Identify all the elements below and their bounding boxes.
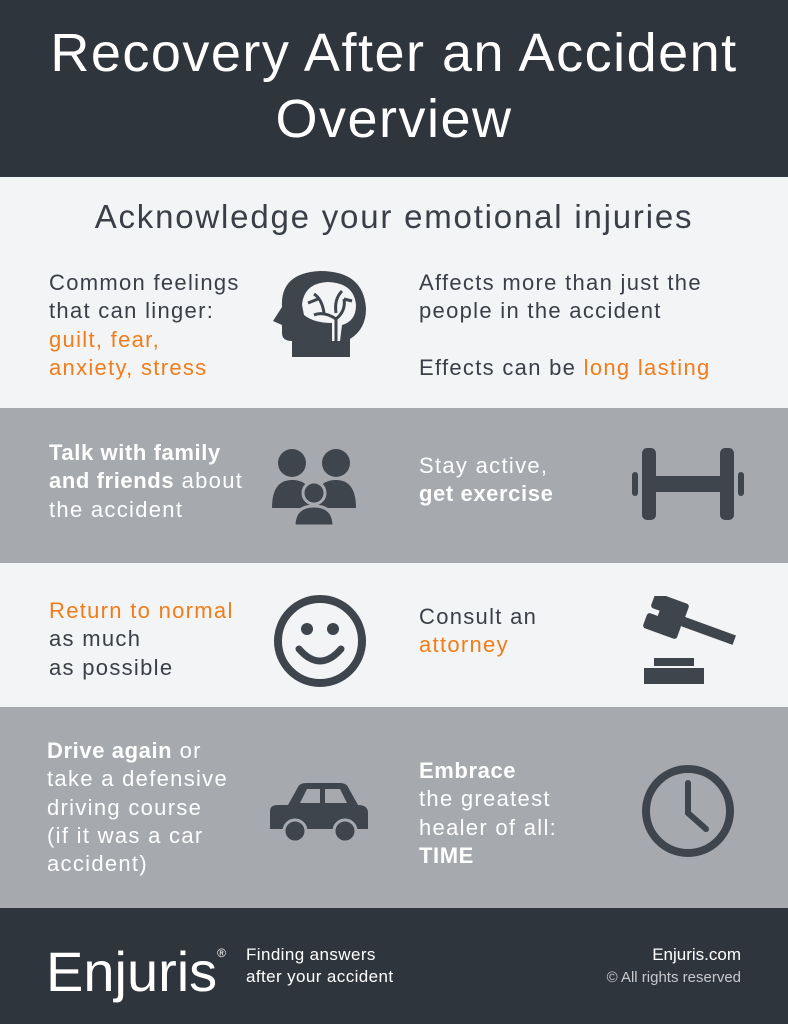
text: embrace time: TIME [419,843,474,868]
text: talk: and friends about [49,468,243,493]
icon: people [272,449,356,524]
text: stay active: get exercise [419,481,553,506]
subtitle: Acknowledge your emotional injuries [95,198,693,235]
text: affects more: Affects more than just the [419,270,702,295]
text: common feelings [49,270,240,380]
text: attorney: Consult an [419,604,537,629]
tagline [246,945,393,986]
text: common feelings: anxiety, stress [49,355,207,380]
icon: clock [642,765,734,857]
text: common feelings: guilt, fear, [49,327,160,352]
text: drive again [47,738,228,876]
logo: Enjuris® [46,940,226,1003]
icon: brain head [273,271,366,357]
text: embrace time [419,758,557,868]
text: common feelings: Common feelings [49,270,240,295]
text: embrace time: Embrace [419,758,516,783]
text: return to normal: Return to normal [49,598,234,623]
icon: smiley [274,595,366,687]
text: affects more: people in the accident [419,298,662,323]
text: stay active [419,453,553,506]
text: drive again: Drive again or [47,738,202,763]
text: drive again: driving course [47,795,202,820]
title: Recovery After an Accident [50,23,738,83]
text: attorney [419,604,537,657]
text: affects more [419,270,702,323]
panel: talk / exercise [0,408,788,563]
text: common feelings: that can linger: [49,298,214,323]
text: drive again: (if it was a car [47,823,204,848]
text: drive again: take a defensive [47,766,228,791]
tagline: Finding answers [246,945,376,964]
icon: dumbbell [632,448,744,520]
text: embrace time: the greatest [419,786,551,811]
text: return to normal [49,598,234,680]
text: stay active: Stay active, [419,453,548,478]
text: drive again: accident) [47,851,148,876]
text: embrace time: healer of all: [419,815,557,840]
text: talk: Talk with family [49,440,221,465]
icon: car [270,783,368,840]
text: talk [49,440,243,522]
panel: emotional injuries [0,177,788,408]
text: talk: the accident [49,497,183,522]
icon: gavel [643,596,736,684]
site: © All rights reserved [607,969,741,986]
header [0,0,788,177]
title [50,23,738,149]
text: long lasting: Effects can be long lasting [419,355,711,380]
text: attorney: attorney [419,632,509,657]
site: Enjuris.com [652,945,741,964]
panel: drive / time [0,707,788,908]
text: return to normal: as possible [49,655,173,680]
site [606,945,741,986]
text: return to normal: as much [49,626,141,651]
panel: normal / attorney [0,563,788,707]
tagline: after your accident [246,967,393,986]
title: Overview [275,89,513,149]
footer [0,908,788,1024]
